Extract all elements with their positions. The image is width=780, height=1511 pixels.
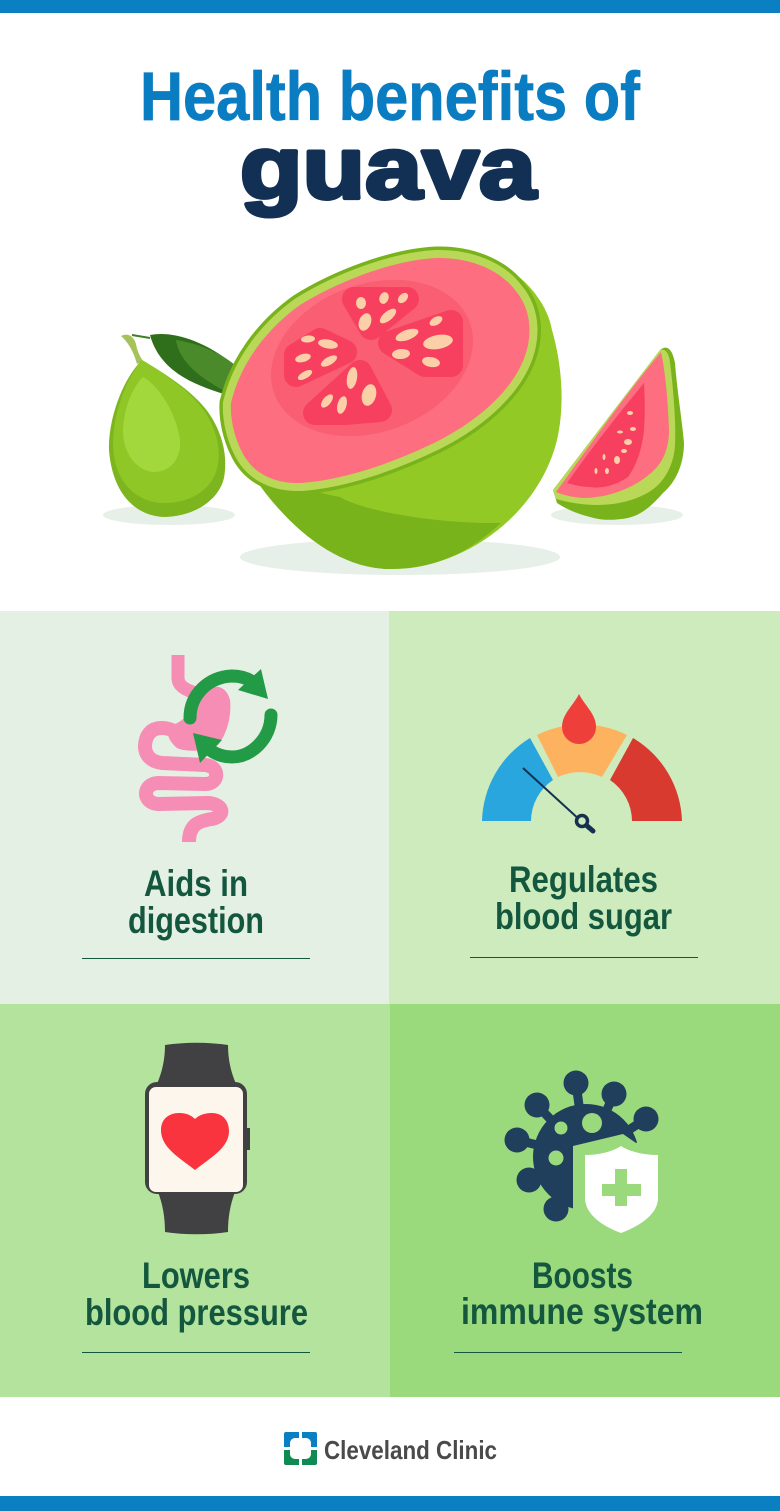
icon: blood sugar gauge: [482, 694, 682, 832]
seed lobes: [296, 299, 451, 413]
cut rim light: [231, 258, 529, 483]
icon: virus and shield: [504, 1070, 664, 1240]
label: blood pressure: [85, 1292, 308, 1333]
panel: boosts immune system: [390, 1004, 780, 1397]
illustration: guava fruits: [103, 248, 684, 575]
icon: smart watch with heart: [145, 1043, 250, 1234]
icon: digestive system with arrows: [145, 655, 271, 842]
logo: Cleveland Clinic: Cleveland Clinic: [324, 1435, 497, 1465]
title: [140, 58, 641, 217]
label: [495, 859, 672, 937]
label: Regulates: [509, 859, 658, 900]
panel: aids in digestion: [0, 611, 389, 1004]
label: [461, 1255, 703, 1332]
half guava shaded base: [232, 440, 501, 569]
top bar: [0, 0, 780, 13]
title: Health benefits of: [140, 58, 641, 135]
label: [85, 1255, 308, 1333]
panel: regulates blood sugar: [389, 611, 780, 1004]
bottom bar: [0, 1496, 780, 1511]
cut rim dark edge: [231, 258, 529, 483]
label: Lowers: [142, 1255, 250, 1296]
leaf: [150, 334, 236, 394]
title: guava: [240, 118, 537, 217]
arrow: top arc: [190, 669, 268, 718]
ground shadows: [103, 505, 683, 575]
half guava body: [221, 248, 562, 569]
label: blood sugar: [495, 896, 672, 937]
label: [128, 863, 264, 941]
logo: Cleveland Clinic: [284, 1432, 497, 1466]
label: Boosts: [532, 1255, 633, 1296]
flesh inner zone: [249, 253, 495, 463]
flesh: [231, 258, 529, 483]
guava wedge: [553, 348, 684, 520]
panel: lowers blood pressure: [0, 1004, 390, 1397]
arrow: bottom arc: [193, 715, 271, 763]
label: immune system: [461, 1291, 703, 1332]
seeds: [294, 291, 454, 415]
label: digestion: [128, 900, 264, 941]
whole guava with stem: [109, 335, 225, 517]
label: Aids in: [144, 863, 248, 904]
